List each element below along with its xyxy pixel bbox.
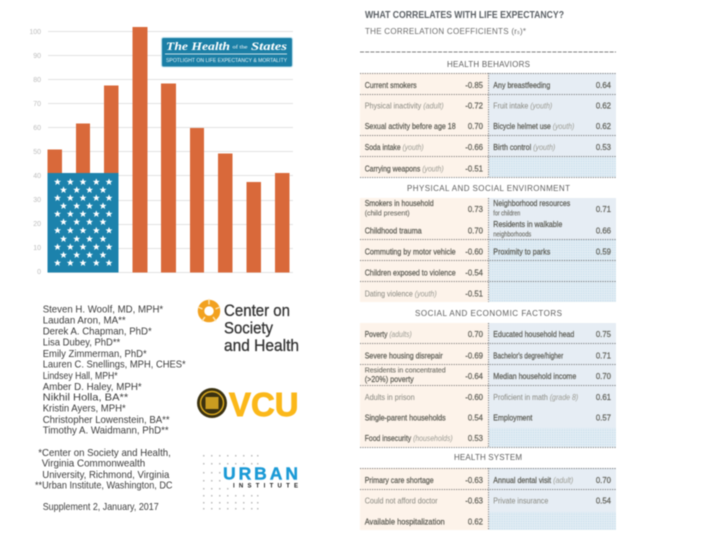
- orange bars: [48, 27, 290, 272]
- panel: health behaviors: 0.70: [468, 122, 484, 131]
- y axis labels: 100: [29, 29, 41, 36]
- panel: health behaviors: -0.85: [465, 81, 484, 90]
- logo: Center on Society and Health: Center on: [224, 302, 290, 320]
- panel: health system: Available hospitalization: [365, 517, 445, 527]
- panel: physical and social environment: -0.54: [465, 268, 484, 277]
- affiliations footnote: *Center on Society and Health,: [38, 447, 171, 459]
- affiliations footnote: [35, 447, 173, 492]
- panel: social and economic factors: Bachelor's degree/higher: [493, 351, 563, 361]
- author list: Christopher Lowenstein, BA**: [43, 414, 170, 426]
- panel: physical and social environment: 0.59: [596, 247, 611, 256]
- dashed rule: [360, 51, 616, 53]
- panel: health behaviors: -0.51: [465, 164, 483, 173]
- panel: health system: Could not afford doctor: [365, 496, 438, 506]
- y axis labels: 40: [33, 173, 41, 180]
- panel: physical and social environment: Children exposed to violence: [365, 267, 456, 277]
- panel: physical and social environment: Proximity to parks: [493, 246, 550, 256]
- panel: physical and social environment: neighborhoods: [493, 230, 531, 238]
- panel: physical and social environment: Residents in walkable: [493, 219, 563, 229]
- y axis labels: 30: [33, 197, 41, 204]
- panel: social and economic factors: 0.54: [468, 414, 484, 423]
- affiliations footnote: **Urban Institute, Washington, DC: [35, 480, 173, 492]
- panel: social and economic factors: 0.53: [468, 434, 483, 443]
- author list: Nikhil Holla, BA**: [43, 392, 128, 404]
- panel: physical and social environment: Smokers in household: [365, 198, 434, 208]
- panel: physical and social environment: Dating violence (youth): [365, 288, 437, 298]
- logo: Center on Society and Health: Society: [224, 320, 274, 338]
- y axis labels: 90: [33, 53, 41, 60]
- panel: social and economic factors: Adults in prison: [365, 392, 415, 402]
- y axis labels: [29, 29, 41, 276]
- panel: health system: Primary care shortage: [365, 475, 434, 485]
- panel: physical and social environment: (child present): [365, 208, 410, 218]
- panel: social and economic factors: Severe housing disrepair: [365, 351, 443, 361]
- flag block with stars: [48, 173, 118, 272]
- panel: physical and social environment: 0.73: [468, 205, 483, 214]
- y axis labels: 20: [33, 221, 41, 228]
- panel: social and economic factors: [360, 309, 616, 448]
- panel: social and economic factors: Educated household head: [493, 329, 575, 339]
- affiliations footnote: University, Richmond, Virginia: [42, 469, 169, 481]
- panel: health system: Annual dental visit (adult): [493, 475, 573, 485]
- panel: physical and social environment: Commuting by motor vehicle: [365, 246, 456, 256]
- logo: Center on Society and Health: [198, 299, 299, 355]
- panel: social and economic factors: Median household income: [493, 371, 577, 381]
- panel: health system: -0.63: [465, 476, 483, 485]
- panel: health behaviors: Soda intake (youth): [365, 142, 424, 152]
- panel: physical and social environment: Neighborhood resources: [493, 198, 570, 208]
- panel: health behaviors: -0.72: [465, 102, 483, 111]
- panel: physical and social environment: [360, 184, 616, 302]
- author list: [43, 304, 186, 436]
- panel: health system: 0.70: [596, 476, 612, 485]
- badge: The Health of the States: The Health: [166, 41, 230, 53]
- panel: social and economic factors: 0.57: [596, 414, 611, 423]
- panel: health behaviors: 0.62: [596, 102, 611, 111]
- panel: health behaviors: Sexual activity before age 18: [365, 121, 456, 131]
- supplement date: Supplement 2, January, 2017: [43, 501, 159, 513]
- panel: health behaviors: Any breastfeeding: [493, 80, 551, 90]
- heading: social and economic factors: SOCIAL AND ECONOMIC FACTORS: [415, 309, 562, 318]
- heading: physical and social environment: PHYSICAL AND SOCIAL ENVIRONMENT: [407, 184, 570, 193]
- author list: Timothy A. Waidmann, PhD**: [43, 424, 169, 436]
- panel: social and economic factors: Employment: [493, 413, 533, 423]
- subtitle: THE CORRELATION COEFFICIENTS (rs)*: [365, 27, 526, 36]
- panel: social and economic factors: Proficient in math (grade 8): [493, 392, 578, 402]
- panel: social and economic factors: 0.70: [468, 330, 484, 339]
- heading: health behaviors: HEALTH BEHAVIORS: [447, 60, 530, 69]
- panel: social and economic factors: Poverty (adults): [365, 329, 412, 339]
- badge: The Health of the States: SPOTLIGHT ON LIFE EXPECTANCY & MORTALITY: [166, 58, 288, 64]
- panel: social and economic factors: 0.70: [596, 372, 612, 381]
- panel: health behaviors: [360, 60, 616, 178]
- panel: physical and social environment: -0.60: [465, 247, 484, 256]
- logo: VCU: [197, 386, 298, 423]
- panel: health behaviors: Physical inactivity (adult): [365, 101, 444, 111]
- badge: The Health of the States: States: [251, 41, 288, 53]
- panel: physical and social environment: for children: [493, 208, 520, 218]
- panel: physical and social environment: Childhood trauma: [365, 226, 422, 236]
- heading: health system: HEALTH SYSTEM: [454, 453, 522, 462]
- author list: Lauren C. Snellings, MPH, CHES*: [43, 358, 186, 370]
- panel: physical and social environment: 0.66: [596, 227, 611, 236]
- panel: social and economic factors: Residents in concentrated: [365, 366, 446, 374]
- panel: health system: 0.62: [468, 518, 483, 527]
- panel: health behaviors: Current smokers: [365, 80, 417, 90]
- panel: health behaviors: 0.64: [596, 81, 612, 90]
- y axis labels: 60: [33, 125, 41, 132]
- panel: social and economic factors: -0.69: [465, 352, 483, 361]
- badge: The Health of the States: [162, 38, 292, 67]
- panel: health system: -0.63: [465, 497, 483, 506]
- panel: social and economic factors: Single-parent households: [365, 413, 446, 423]
- panel: health behaviors: Bicycle helmet use (youth): [493, 121, 574, 131]
- author list: Steven H. Woolf, MD, MPH*: [43, 304, 163, 316]
- y axis labels: 0: [37, 269, 41, 276]
- panel: social and economic factors: 0.71: [596, 352, 611, 361]
- logo: Urban Institute: URBAN: [223, 464, 298, 484]
- author list: Lisa Dubey, PhD**: [43, 336, 120, 348]
- y axis labels: 50: [33, 149, 41, 156]
- panel: health system: 0.54: [596, 497, 612, 506]
- panel: health system: [360, 453, 616, 530]
- panel: social and economic factors: Food insecurity (households): [365, 433, 453, 443]
- panel: health behaviors: Carrying weapons (youth): [365, 163, 444, 173]
- panel: social and economic factors: -0.64: [465, 372, 484, 381]
- author list: Lindsey Hall, MPH*: [43, 370, 118, 382]
- logo: Center on Society and Health: and Health: [224, 337, 299, 355]
- badge: The Health of the States: of the: [232, 46, 249, 50]
- affiliations footnote: Virginia Commonwealth: [42, 458, 145, 470]
- panel: social and economic factors: 0.61: [596, 393, 611, 402]
- panel: physical and social environment: -0.51: [465, 289, 483, 298]
- panel: health behaviors: Fruit intake (youth): [493, 101, 552, 111]
- author list: Kristin Ayers, MPH*: [43, 402, 126, 414]
- panel: health system: Private insurance: [493, 496, 549, 506]
- y axis labels: 70: [33, 101, 41, 108]
- author list: Derek A. Chapman, PhD*: [43, 326, 152, 338]
- logo: Urban Institute: INSTITUTE: [233, 484, 298, 490]
- panel: health behaviors: 0.62: [596, 122, 611, 131]
- panel: physical and social environment: 0.70: [468, 227, 484, 236]
- panel: health behaviors: -0.66: [465, 143, 483, 152]
- author list: Emily Zimmerman, PhD*: [43, 348, 147, 360]
- title: WHAT CORRELATES WITH LIFE EXPECTANCY?: [365, 9, 564, 21]
- panel: physical and social environment: 0.71: [596, 205, 611, 214]
- author list: Amber D. Haley, MPH*: [43, 381, 142, 393]
- panel: social and economic factors: (>20%) poverty: [365, 374, 414, 384]
- logo: Urban Institute: [203, 455, 298, 510]
- panel: health behaviors: 0.53: [596, 143, 611, 152]
- y axis labels: 80: [33, 77, 41, 84]
- logo: VCU: VCU: [229, 386, 298, 423]
- bar chart: [29, 27, 293, 276]
- panel: social and economic factors: -0.60: [465, 393, 484, 402]
- panel: health behaviors: Birth control (youth): [493, 142, 555, 152]
- panel: social and economic factors: 0.75: [596, 330, 612, 339]
- author list: Laudan Aron, MA**: [43, 314, 126, 326]
- y axis labels: 10: [33, 245, 41, 252]
